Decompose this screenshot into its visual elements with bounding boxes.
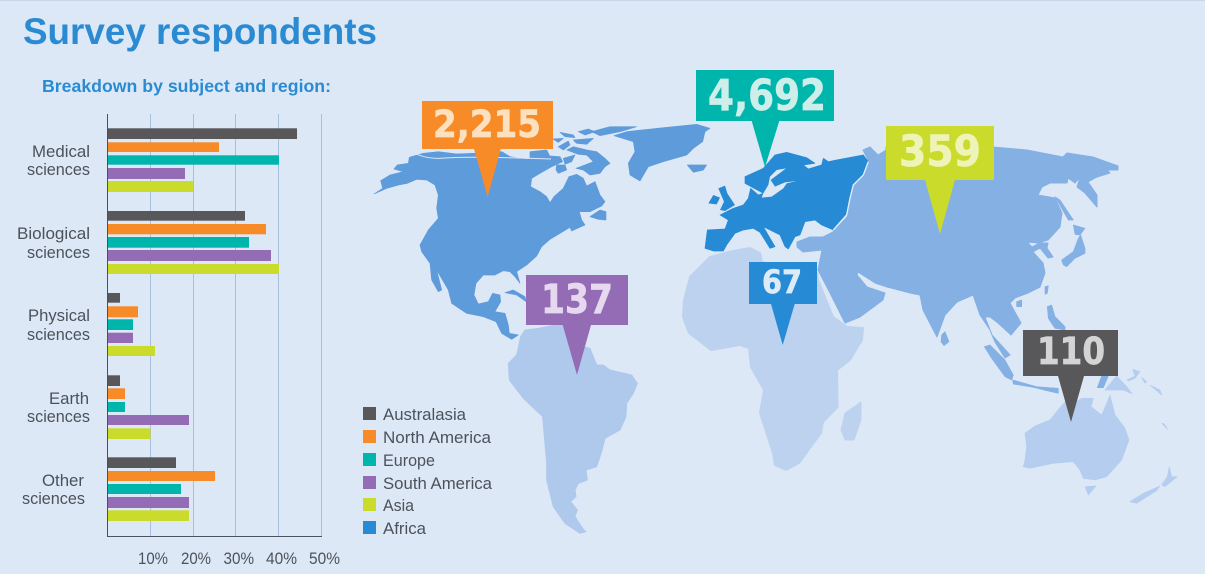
- map: South America: [508, 323, 637, 533]
- bar chart: breakdown by subject and region: [17, 114, 340, 568]
- group: biological sciences bars: [108, 211, 279, 274]
- legend: [363, 406, 493, 538]
- callout: Europe 4,692: 4,692: [708, 71, 826, 121]
- x axis labels: 20%: [181, 550, 211, 568]
- callout: Asia 359: 359: [899, 127, 981, 177]
- callout: North America 2,215: 2,215: [433, 103, 541, 146]
- chart axes: [108, 114, 322, 536]
- world map: [374, 124, 1177, 533]
- callout: South America 137: 137: [541, 277, 613, 323]
- callout: South America 137: [526, 275, 628, 375]
- x axis labels: 50%: [309, 550, 340, 568]
- callout: Europe 4,692: [696, 70, 834, 167]
- map: Madagascar: [841, 402, 861, 440]
- category labels: sciences: [27, 408, 90, 426]
- map: Africa: [683, 248, 863, 470]
- category labels: Other: [42, 472, 84, 490]
- x axis labels: 30%: [224, 550, 254, 568]
- category labels: Physical: [28, 307, 90, 325]
- callout: Australasia 110: 110: [1037, 330, 1105, 373]
- category labels: sciences: [27, 161, 90, 179]
- map: Australasia: [1023, 369, 1177, 503]
- group: earth sciences bars: [108, 375, 189, 439]
- legend: South America: [383, 475, 493, 493]
- subtitle: Breakdown by subject and region:: [42, 76, 331, 96]
- map: Europe: [705, 152, 868, 251]
- x axis labels: [138, 550, 340, 568]
- callout: Asia 359: [886, 126, 994, 234]
- map: Asia: [797, 147, 1118, 393]
- legend: North America: [383, 429, 492, 447]
- group: other sciences bars: [108, 457, 215, 521]
- legend: Australasia: [383, 406, 467, 424]
- category labels: sciences: [22, 490, 85, 508]
- category labels: [17, 143, 90, 508]
- callout: Africa 67: 67: [762, 263, 802, 301]
- x axis labels: 10%: [138, 550, 168, 568]
- category labels: sciences: [27, 326, 90, 344]
- map: North America: [374, 124, 710, 339]
- group: physical sciences bars: [108, 293, 155, 356]
- legend: Europe: [383, 452, 435, 470]
- category labels: Biological: [17, 225, 90, 243]
- x axis labels: 40%: [266, 550, 297, 568]
- group: medical sciences bars: [108, 128, 297, 192]
- callout: Australasia 110: [1023, 330, 1118, 422]
- category labels: sciences: [27, 244, 90, 262]
- legend: Africa: [383, 520, 427, 538]
- callout: Africa 67: [749, 262, 817, 345]
- category labels: Earth: [49, 390, 89, 408]
- category labels: Medical: [32, 143, 90, 161]
- callout: North America 2,215: [422, 101, 553, 197]
- title: Survey respondents: [23, 11, 377, 52]
- legend: Asia: [383, 497, 415, 515]
